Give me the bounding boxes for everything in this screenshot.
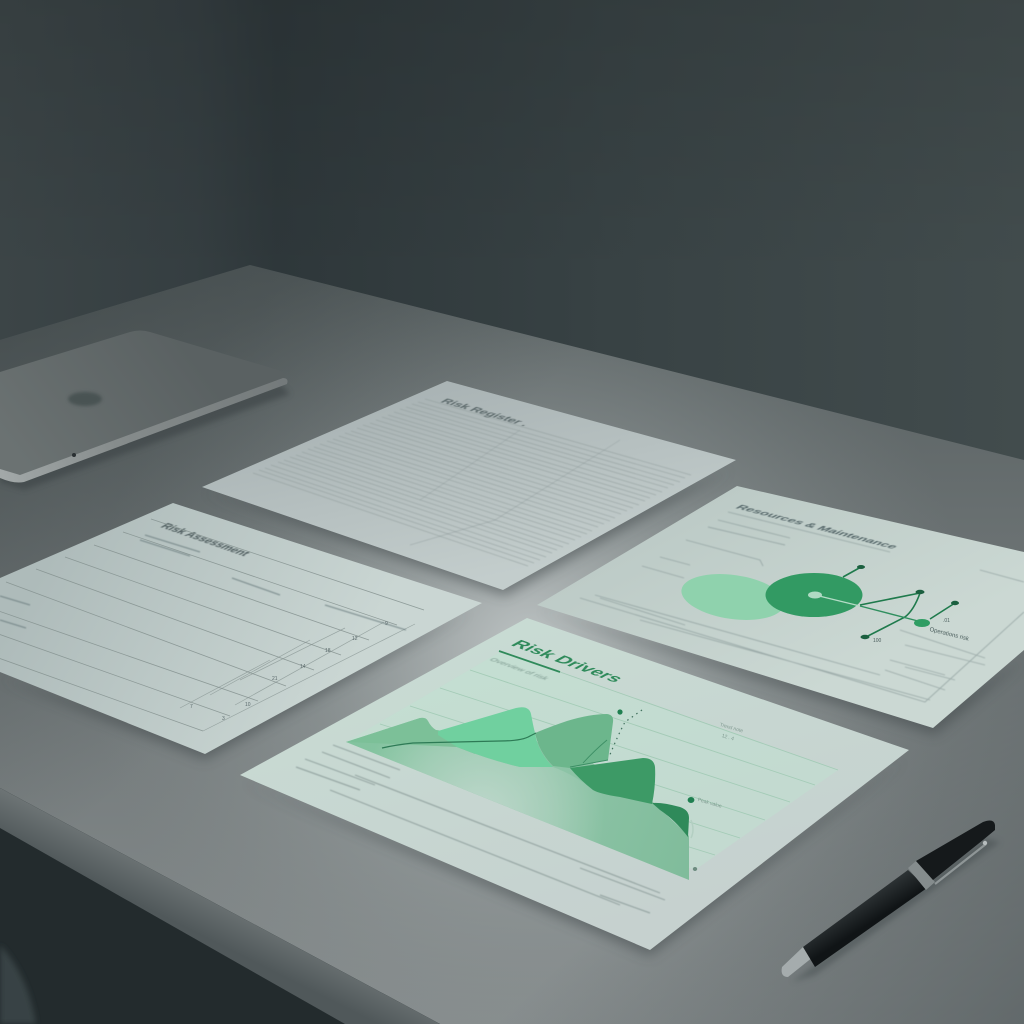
heading: top paper: Risk Register . — [437, 398, 532, 428]
pen barrel — [803, 870, 927, 967]
panel: top paper with ruled form — [202, 381, 736, 590]
chart labels: Peak value — [697, 797, 723, 810]
chart labels: Trend note — [719, 722, 744, 735]
pen ring — [908, 861, 935, 890]
icon: laptop logo — [68, 392, 102, 406]
pen tip — [782, 947, 813, 977]
darkest peak — [652, 803, 689, 837]
light peak — [438, 707, 553, 767]
chart body — [346, 718, 689, 880]
ruled table lines — [0, 519, 424, 731]
small table numbers: 18 — [325, 648, 331, 654]
trend line — [382, 733, 536, 748]
area chart — [346, 707, 697, 880]
dark ellipse — [766, 573, 862, 617]
table top — [0, 265, 1024, 1024]
chart body fade — [388, 745, 588, 838]
text and frame lines: right paper — [580, 512, 1024, 702]
panel: right paper with circle diagram — [537, 486, 1024, 728]
laptop port — [72, 453, 76, 457]
ruled lines: top paper — [253, 399, 691, 566]
table front edge — [0, 788, 440, 1024]
small table numbers: 10 — [245, 702, 251, 708]
network labels — [873, 618, 970, 644]
subtitle: bottom paper: Overview of risk — [487, 657, 551, 681]
laptop — [0, 330, 290, 490]
network labels: .01 — [943, 618, 950, 624]
chart background tint — [346, 652, 838, 870]
panel: bottom paper with area chart — [240, 618, 909, 950]
dark peak — [570, 758, 655, 804]
chart markers — [617, 709, 623, 715]
chart grid lines — [350, 670, 838, 855]
heading: left paper: Risk Assessment — [158, 522, 253, 558]
network labels: Operations risk — [929, 627, 970, 643]
small table numbers: 3 — [222, 716, 225, 722]
pen — [782, 821, 1000, 982]
paper shadows — [0, 470, 1024, 956]
chart back peak — [346, 718, 475, 754]
small table numbers: 14 — [300, 664, 306, 670]
network lines — [843, 567, 955, 637]
pen clip — [935, 844, 986, 884]
dotted connector — [609, 710, 642, 757]
panel: left paper with table — [0, 503, 482, 754]
pale ellipse — [682, 574, 780, 620]
medium peak — [535, 714, 613, 768]
heading: bottom paper: Risk Drivers — [507, 638, 628, 685]
pen cap — [916, 821, 995, 880]
small table numbers: 21 — [272, 676, 278, 682]
wall background — [0, 0, 1024, 560]
small table numbers: 7 — [190, 704, 193, 710]
network nodes — [808, 592, 822, 598]
body text lines: bottom paper — [296, 745, 665, 913]
small table numbers: 12 — [352, 636, 358, 642]
chart labels — [697, 722, 744, 810]
network labels: 100 — [873, 638, 882, 644]
heading: right paper: Resources & Maintenance — [732, 504, 900, 551]
chart labels: 12 . 4 — [721, 733, 735, 742]
small table numbers: 9 — [385, 621, 388, 627]
small table numbers — [190, 621, 388, 722]
